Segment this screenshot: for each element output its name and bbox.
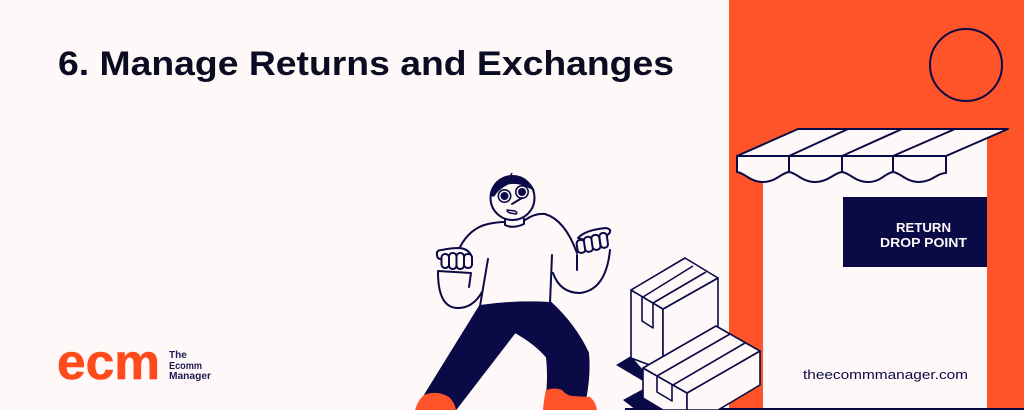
upper box	[631, 258, 718, 370]
mouth	[507, 210, 517, 214]
left fist	[437, 248, 472, 269]
sign: return drop point: RETURN	[896, 221, 951, 235]
figure: shrugging man	[415, 173, 610, 410]
sign: return drop point	[843, 197, 987, 267]
glasses	[498, 185, 529, 203]
sign: return drop point: DROP POINT	[880, 236, 967, 250]
awning	[737, 129, 1008, 182]
logo tagline	[169, 350, 211, 382]
logo tagline: Manager	[169, 371, 211, 382]
neck	[505, 219, 524, 227]
logo tagline: The	[169, 350, 187, 361]
icon: stacked boxes	[616, 258, 760, 410]
panel: store front	[737, 129, 1008, 410]
ground line	[625, 408, 1024, 410]
right fist	[576, 228, 610, 253]
logo: ecm: ecm	[57, 334, 160, 390]
shoes	[415, 388, 597, 410]
right arm	[553, 250, 610, 293]
lower box	[643, 326, 760, 410]
left arm	[438, 271, 482, 308]
trousers	[425, 302, 589, 410]
nose	[512, 198, 522, 204]
hair	[491, 173, 534, 196]
icon: sun circle	[930, 29, 1002, 101]
sweater	[460, 214, 577, 306]
box shadows	[616, 356, 650, 381]
title: 6. Manage Returns and Exchanges	[58, 45, 674, 83]
website url: theecommmanager.com	[803, 367, 968, 382]
panel: orange backdrop	[729, 0, 1024, 410]
logo tagline: Ecomm	[169, 361, 202, 372]
logo: ecm	[57, 334, 211, 390]
head	[490, 176, 534, 220]
